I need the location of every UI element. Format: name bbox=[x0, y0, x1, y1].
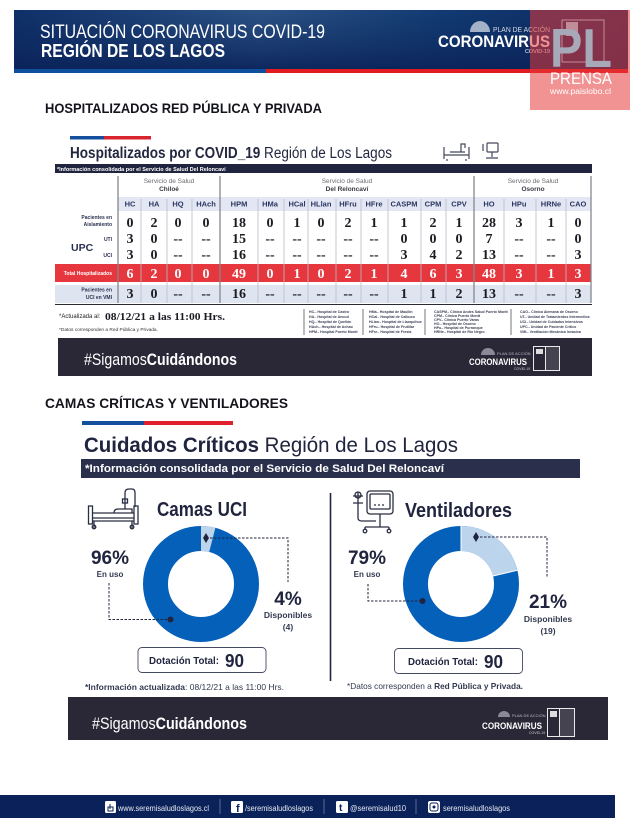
update date note: *Datos corresponden a Red Pública y Privada. bbox=[59, 327, 158, 333]
values: UTI: 3 bbox=[126, 232, 134, 247]
table code header bbox=[118, 197, 591, 211]
note: información actualizada: *Información actualizada : 08/12/21 a las 11:00 Hrs. bbox=[85, 682, 284, 692]
box: dotación ventiladores: 90 bbox=[484, 652, 503, 672]
legend of abbreviations: VMI.- Ventilación Mecánica Invasiva bbox=[520, 330, 582, 334]
table code header: CAO bbox=[570, 200, 586, 208]
legend of abbreviations: HRNe.- Hospital de Río Negro bbox=[434, 330, 485, 334]
values: UTI: 15 bbox=[232, 232, 246, 247]
values: VMI: -- bbox=[316, 287, 326, 302]
donut: camas UCI bbox=[156, 526, 246, 630]
values: UTI: -- bbox=[316, 232, 326, 247]
callout: 21% disponibles: (19) bbox=[540, 626, 556, 636]
icon: facebook: f bbox=[236, 803, 240, 815]
panel: cuidados críticos bbox=[68, 421, 608, 740]
values: UTI: 0 bbox=[150, 232, 158, 247]
table code header: HFru bbox=[339, 200, 357, 208]
values: UCI: -- bbox=[514, 248, 524, 263]
footer twitter: @seremisalud10 bbox=[350, 804, 407, 813]
legend of abbreviations: HFre.- Hospital de Fresia bbox=[369, 330, 412, 334]
values: UTI: 0 bbox=[574, 232, 582, 247]
info bar: *Información consolidada por el Servicio de Salud Del Reloncaví bbox=[85, 463, 445, 475]
heading: camas críticas: CAMAS CRÍTICAS Y VENTILADORES bbox=[45, 395, 288, 411]
row labels: Aislamiento bbox=[84, 222, 112, 228]
info bar: *Información consolidada por el Servicio de Salud Del Reloncaví bbox=[57, 167, 226, 173]
banner: sigamos cuidándonos 2: COVID-19 bbox=[529, 731, 545, 735]
values: UCI: -- bbox=[292, 248, 302, 263]
values: aislamiento: 18 bbox=[232, 216, 246, 231]
values: total: 0 bbox=[266, 267, 274, 282]
values: total: 0 bbox=[318, 267, 324, 282]
values: aislamiento: 0 bbox=[126, 216, 134, 231]
callout: 96% en uso: En uso bbox=[97, 570, 123, 579]
values: aislamiento: 28 bbox=[482, 216, 496, 231]
legend of abbreviations: HPM.- Hospital Puerto Montt bbox=[309, 330, 358, 334]
values: UCI: 13 bbox=[482, 248, 496, 263]
values: VMI: 2 bbox=[456, 287, 462, 302]
row labels: UCI bbox=[103, 253, 113, 259]
values: VMI bbox=[126, 287, 582, 302]
table code header: HC bbox=[125, 200, 136, 208]
legend of abbreviations: CASPM.- Clínica Andes Salud Puerto Montt bbox=[434, 310, 509, 314]
values: VMI: -- bbox=[201, 287, 211, 302]
values: VMI: 3 bbox=[126, 287, 134, 302]
legend of abbreviations: CAO.- Clínica Alemana de Osorno bbox=[520, 310, 579, 314]
watermark: PL Prensa: www.paislobo.cl bbox=[549, 87, 611, 96]
banner: sigamos cuidándonos 1: COVID-19 bbox=[514, 367, 530, 371]
values: total: 0 bbox=[174, 267, 182, 282]
callout: 96% en uso: 96% bbox=[91, 548, 129, 569]
section title: Cuidados Críticos Región de Los Lagos bbox=[84, 434, 458, 457]
values: VMI: 16 bbox=[232, 287, 246, 302]
header banner bbox=[14, 10, 628, 73]
table code header: HFre bbox=[365, 200, 383, 208]
service headings: Servicio de Salud bbox=[322, 178, 373, 185]
icon: twitter: t bbox=[339, 803, 343, 814]
table code header: HPM bbox=[231, 200, 247, 208]
values: UCI: -- bbox=[316, 248, 326, 263]
values: UTI: 0 bbox=[430, 232, 436, 247]
table code header: HAch bbox=[196, 200, 216, 208]
footer bar bbox=[0, 795, 615, 818]
values: aislamiento: 1 bbox=[370, 216, 378, 231]
values: aislamiento: 3 bbox=[516, 216, 522, 231]
label: camas UCI: Camas UCI bbox=[157, 499, 247, 521]
info bar bbox=[55, 164, 592, 173]
service headings: Del Reloncaví bbox=[326, 186, 369, 193]
values: total: 3 bbox=[574, 267, 582, 282]
values: UCI: -- bbox=[265, 248, 275, 263]
icon: instagram bbox=[428, 801, 440, 813]
callout: 4% disponibles: (4) bbox=[283, 622, 293, 632]
values: UCI: -- bbox=[201, 248, 211, 263]
callout: 79% en uso bbox=[348, 548, 426, 604]
table code header: HQ bbox=[172, 200, 184, 208]
legend of abbreviations: UT.- Unidad de Tratamientos Intermedios bbox=[520, 315, 590, 319]
values: aislamiento: 0 bbox=[574, 216, 582, 231]
donut: ventiladores bbox=[416, 526, 517, 630]
values: UCI: 3 bbox=[126, 248, 134, 263]
icon: twitter bbox=[336, 801, 348, 814]
values: UCI bbox=[126, 248, 582, 263]
service headings: Osorno bbox=[521, 186, 545, 193]
table code header: HMa bbox=[262, 200, 279, 208]
red total row bbox=[55, 264, 591, 282]
values: VMI: -- bbox=[292, 287, 302, 302]
table code header: CASPM bbox=[390, 200, 418, 208]
legend of abbreviations: HMa.- Hospital de Maullín bbox=[369, 310, 413, 314]
VMI row: Pacientes en bbox=[81, 288, 112, 294]
VMI row bbox=[55, 285, 591, 303]
legend of abbreviations: HA.- Hospital de Ancud bbox=[309, 315, 349, 319]
values: UTI: -- bbox=[265, 232, 275, 247]
header title bbox=[40, 21, 325, 61]
values: total: 49 bbox=[232, 267, 246, 282]
values: UCI: 2 bbox=[456, 248, 462, 263]
footer facebook: /seremisaludloslagos bbox=[245, 804, 313, 813]
legend of abbreviations: HC.- Hospital de Castro bbox=[309, 310, 350, 314]
VMI row: UCI en VMI bbox=[86, 295, 113, 301]
legend of abbreviations: HFru.- Hospital de Frutillar bbox=[369, 325, 415, 329]
service headings: Servicio de Salud bbox=[508, 178, 559, 185]
legend of abbreviations bbox=[304, 309, 590, 335]
values: UCI: -- bbox=[343, 248, 353, 263]
box: dotación ventiladores bbox=[394, 648, 522, 674]
values: VMI: -- bbox=[546, 287, 556, 302]
update date note: *Actualizada al: bbox=[59, 314, 101, 320]
banner: sigamos cuidándonos 2: CORONAVIRUS bbox=[482, 721, 542, 732]
heading: hospitalizados: HOSPITALIZADOS RED PÚBLICA Y PRIVADA bbox=[45, 99, 322, 116]
legend of abbreviations: HQ.- Hospital de Quellón bbox=[309, 320, 351, 324]
values: total: 48 bbox=[482, 267, 496, 282]
values: UCI: 3 bbox=[574, 248, 582, 263]
watermark: PL Prensa: PRENSA bbox=[550, 69, 613, 88]
values: total: 1 bbox=[370, 267, 378, 282]
values: VMI: 0 bbox=[150, 287, 158, 302]
callout: 4% disponibles: Disponibles bbox=[264, 610, 312, 620]
callout: 4% disponibles bbox=[203, 533, 312, 632]
values: UTI: 7 bbox=[486, 232, 492, 247]
note: datos: *Datos corresponden a Red Pública y Privada. bbox=[347, 681, 523, 691]
footer website: www.seremisaludloslagos.cl bbox=[117, 804, 209, 813]
row labels: Pacientes en bbox=[81, 215, 112, 221]
values: UTI: -- bbox=[546, 232, 556, 247]
values: VMI: 3 bbox=[574, 287, 582, 302]
values: total: 0 bbox=[202, 267, 210, 282]
values: aislamiento: 2 bbox=[430, 216, 436, 231]
values: aislamiento: 0 bbox=[318, 216, 324, 231]
service headings: Chiloé bbox=[159, 186, 179, 193]
table title: Hospitalizados por COVID_19 Región de Los Lagos bbox=[70, 145, 392, 162]
service headings bbox=[144, 178, 559, 193]
values: UTI bbox=[126, 232, 582, 247]
callout: 21% disponibles bbox=[473, 532, 572, 636]
icon: facebook bbox=[231, 801, 243, 815]
red total row: Total Hospitalizados bbox=[64, 271, 112, 277]
legend of abbreviations: HPu.- Hospital de Purranque bbox=[434, 326, 483, 330]
header logo: plan de acción coronavirus: COVID-19 bbox=[525, 49, 550, 55]
update date note bbox=[59, 312, 225, 333]
banner: sigamos cuidándonos 1 bbox=[58, 338, 592, 376]
values: VMI: -- bbox=[369, 287, 379, 302]
panel: hospitalizados table bbox=[55, 136, 592, 376]
legend of abbreviations: CPM.- Clínica Puerto Montt bbox=[434, 314, 481, 318]
legend of abbreviations: UCI.- Unidad de Cuidados Intensivos bbox=[520, 320, 583, 324]
values: aislamiento: 2 bbox=[150, 216, 158, 231]
values: VMI: 1 bbox=[430, 287, 436, 302]
values: total: 3 bbox=[516, 267, 522, 282]
header logo: plan de acción coronavirus bbox=[438, 21, 550, 55]
values: aislamiento bbox=[126, 216, 582, 231]
legend of abbreviations: HO.- Hospital de Osorno bbox=[434, 322, 477, 326]
table code header: HRNe bbox=[541, 200, 561, 208]
legend of abbreviations: UPC.- Unidad de Paciente Crítico bbox=[520, 325, 577, 329]
values: total: 2 bbox=[150, 267, 158, 282]
icon: ventilator bbox=[353, 491, 393, 533]
values: UTI: -- bbox=[201, 232, 211, 247]
info bar bbox=[81, 459, 580, 478]
values: UTI: 0 bbox=[400, 232, 408, 247]
banner: sigamos cuidándonos 2 bbox=[68, 697, 608, 740]
row labels bbox=[71, 215, 113, 259]
callout: 79% en uso: 79% bbox=[348, 548, 386, 569]
values: VMI: 13 bbox=[482, 287, 496, 302]
values: aislamiento: 1 bbox=[548, 216, 554, 231]
values: aislamiento: 1 bbox=[456, 216, 462, 231]
values: VMI: 1 bbox=[400, 287, 408, 302]
values: UTI: -- bbox=[369, 232, 379, 247]
table code header: HLlan bbox=[311, 200, 332, 208]
values: aislamiento: 0 bbox=[202, 216, 210, 231]
values: total: 6 bbox=[430, 267, 436, 282]
values: VMI: -- bbox=[514, 287, 524, 302]
values: total: 1 bbox=[294, 267, 300, 282]
header title: REGIÓN DE LOS LAGOS bbox=[41, 40, 225, 61]
callout: 21% disponibles: Disponibles bbox=[524, 614, 572, 624]
values: aislamiento: 2 bbox=[344, 216, 352, 231]
row labels: UPC bbox=[71, 242, 94, 254]
icon: ventilator small bbox=[483, 143, 498, 158]
header title: SITUACIÓN CORONAVIRUS COVID-19 bbox=[40, 21, 325, 43]
box: dotación camas: Dotación Total: bbox=[149, 655, 219, 667]
box: dotación camas bbox=[138, 648, 266, 672]
values: UTI: -- bbox=[292, 232, 302, 247]
values: VMI: -- bbox=[343, 287, 353, 302]
watermark: PL Prensa bbox=[530, 10, 630, 110]
header logo: plan de acción coronavirus: PLAN DE ACCIÓN bbox=[493, 25, 550, 34]
values: VMI: -- bbox=[265, 287, 275, 302]
table code header: CPM bbox=[425, 200, 441, 208]
callout: 96% en uso bbox=[91, 548, 174, 622]
values: total: 6 bbox=[126, 267, 134, 282]
banner: sigamos cuidándonos 1: #SigamosCuidándonos bbox=[84, 350, 237, 369]
table code header: HCal bbox=[288, 200, 306, 208]
values: total: 4 bbox=[400, 267, 408, 282]
banner: sigamos cuidándonos 2: PLAN DE ACCIÓN bbox=[512, 713, 546, 718]
callout: 79% en uso: En uso bbox=[354, 570, 380, 579]
legend of abbreviations: HAch.- Hospital de Achao bbox=[309, 325, 354, 329]
values: UTI: 0 bbox=[456, 232, 462, 247]
legend of abbreviations: HCal.- Hospital de Calbuco bbox=[369, 315, 416, 319]
values: UCI: 0 bbox=[150, 248, 158, 263]
row labels: UTI bbox=[104, 237, 113, 243]
icon: website bbox=[105, 801, 116, 813]
divider bbox=[330, 493, 332, 681]
values: UCI: 16 bbox=[232, 248, 246, 263]
legend of abbreviations: CPV.- Clínica Puerto Varas bbox=[434, 318, 479, 322]
callout: 4% disponibles: 4% bbox=[274, 589, 302, 610]
values: UCI: 3 bbox=[400, 248, 408, 263]
service headings: Servicio de Salud bbox=[144, 178, 195, 185]
values: aislamiento: 0 bbox=[174, 216, 182, 231]
values: UCI: -- bbox=[173, 248, 183, 263]
values: UCI: 4 bbox=[430, 248, 436, 263]
icon: hospital bed bbox=[88, 489, 138, 529]
icon: hospital bed small bbox=[444, 144, 469, 161]
values: UTI: -- bbox=[173, 232, 183, 247]
values: UTI: -- bbox=[343, 232, 353, 247]
values: aislamiento: 1 bbox=[400, 216, 408, 231]
banner: sigamos cuidándonos 1: CORONAVIRUS bbox=[469, 357, 527, 368]
label: ventiladores: Ventiladores bbox=[405, 500, 512, 522]
values: VMI: -- bbox=[173, 287, 183, 302]
table code header: HO bbox=[483, 200, 495, 208]
callout: 21% disponibles: 21% bbox=[529, 592, 567, 613]
watermark: PL Prensa: PL bbox=[550, 17, 612, 79]
values: UTI: -- bbox=[514, 232, 524, 247]
legend of abbreviations: HLlan.- Hospital de Llanquihue bbox=[369, 320, 422, 324]
values: total: 1 bbox=[548, 267, 554, 282]
values: UCI: -- bbox=[546, 248, 556, 263]
header logo: plan de acción coronavirus: CORONAVIRUS bbox=[438, 32, 550, 51]
values: total bbox=[126, 267, 582, 282]
box: dotación ventiladores: Dotación Total: bbox=[408, 656, 478, 668]
banner: sigamos cuidándonos 2: #SigamosCuidándonos bbox=[92, 715, 247, 733]
footer instagram: seremisaludloslagos bbox=[443, 804, 510, 813]
box: dotación camas: 90 bbox=[225, 651, 244, 671]
values: UCI: -- bbox=[369, 248, 379, 263]
table code header: HA bbox=[149, 200, 160, 208]
update date note: 08/12/21 a las 11:00 Hrs. bbox=[105, 312, 225, 323]
values: total: 3 bbox=[456, 267, 462, 282]
values: total: 2 bbox=[344, 267, 352, 282]
table code header: CPV bbox=[451, 200, 467, 208]
values: aislamiento: 1 bbox=[294, 216, 300, 231]
values: aislamiento: 0 bbox=[266, 216, 274, 231]
table code header: HPu bbox=[512, 200, 527, 208]
banner: sigamos cuidándonos 1: PLAN DE ACCIÓN bbox=[497, 351, 531, 356]
